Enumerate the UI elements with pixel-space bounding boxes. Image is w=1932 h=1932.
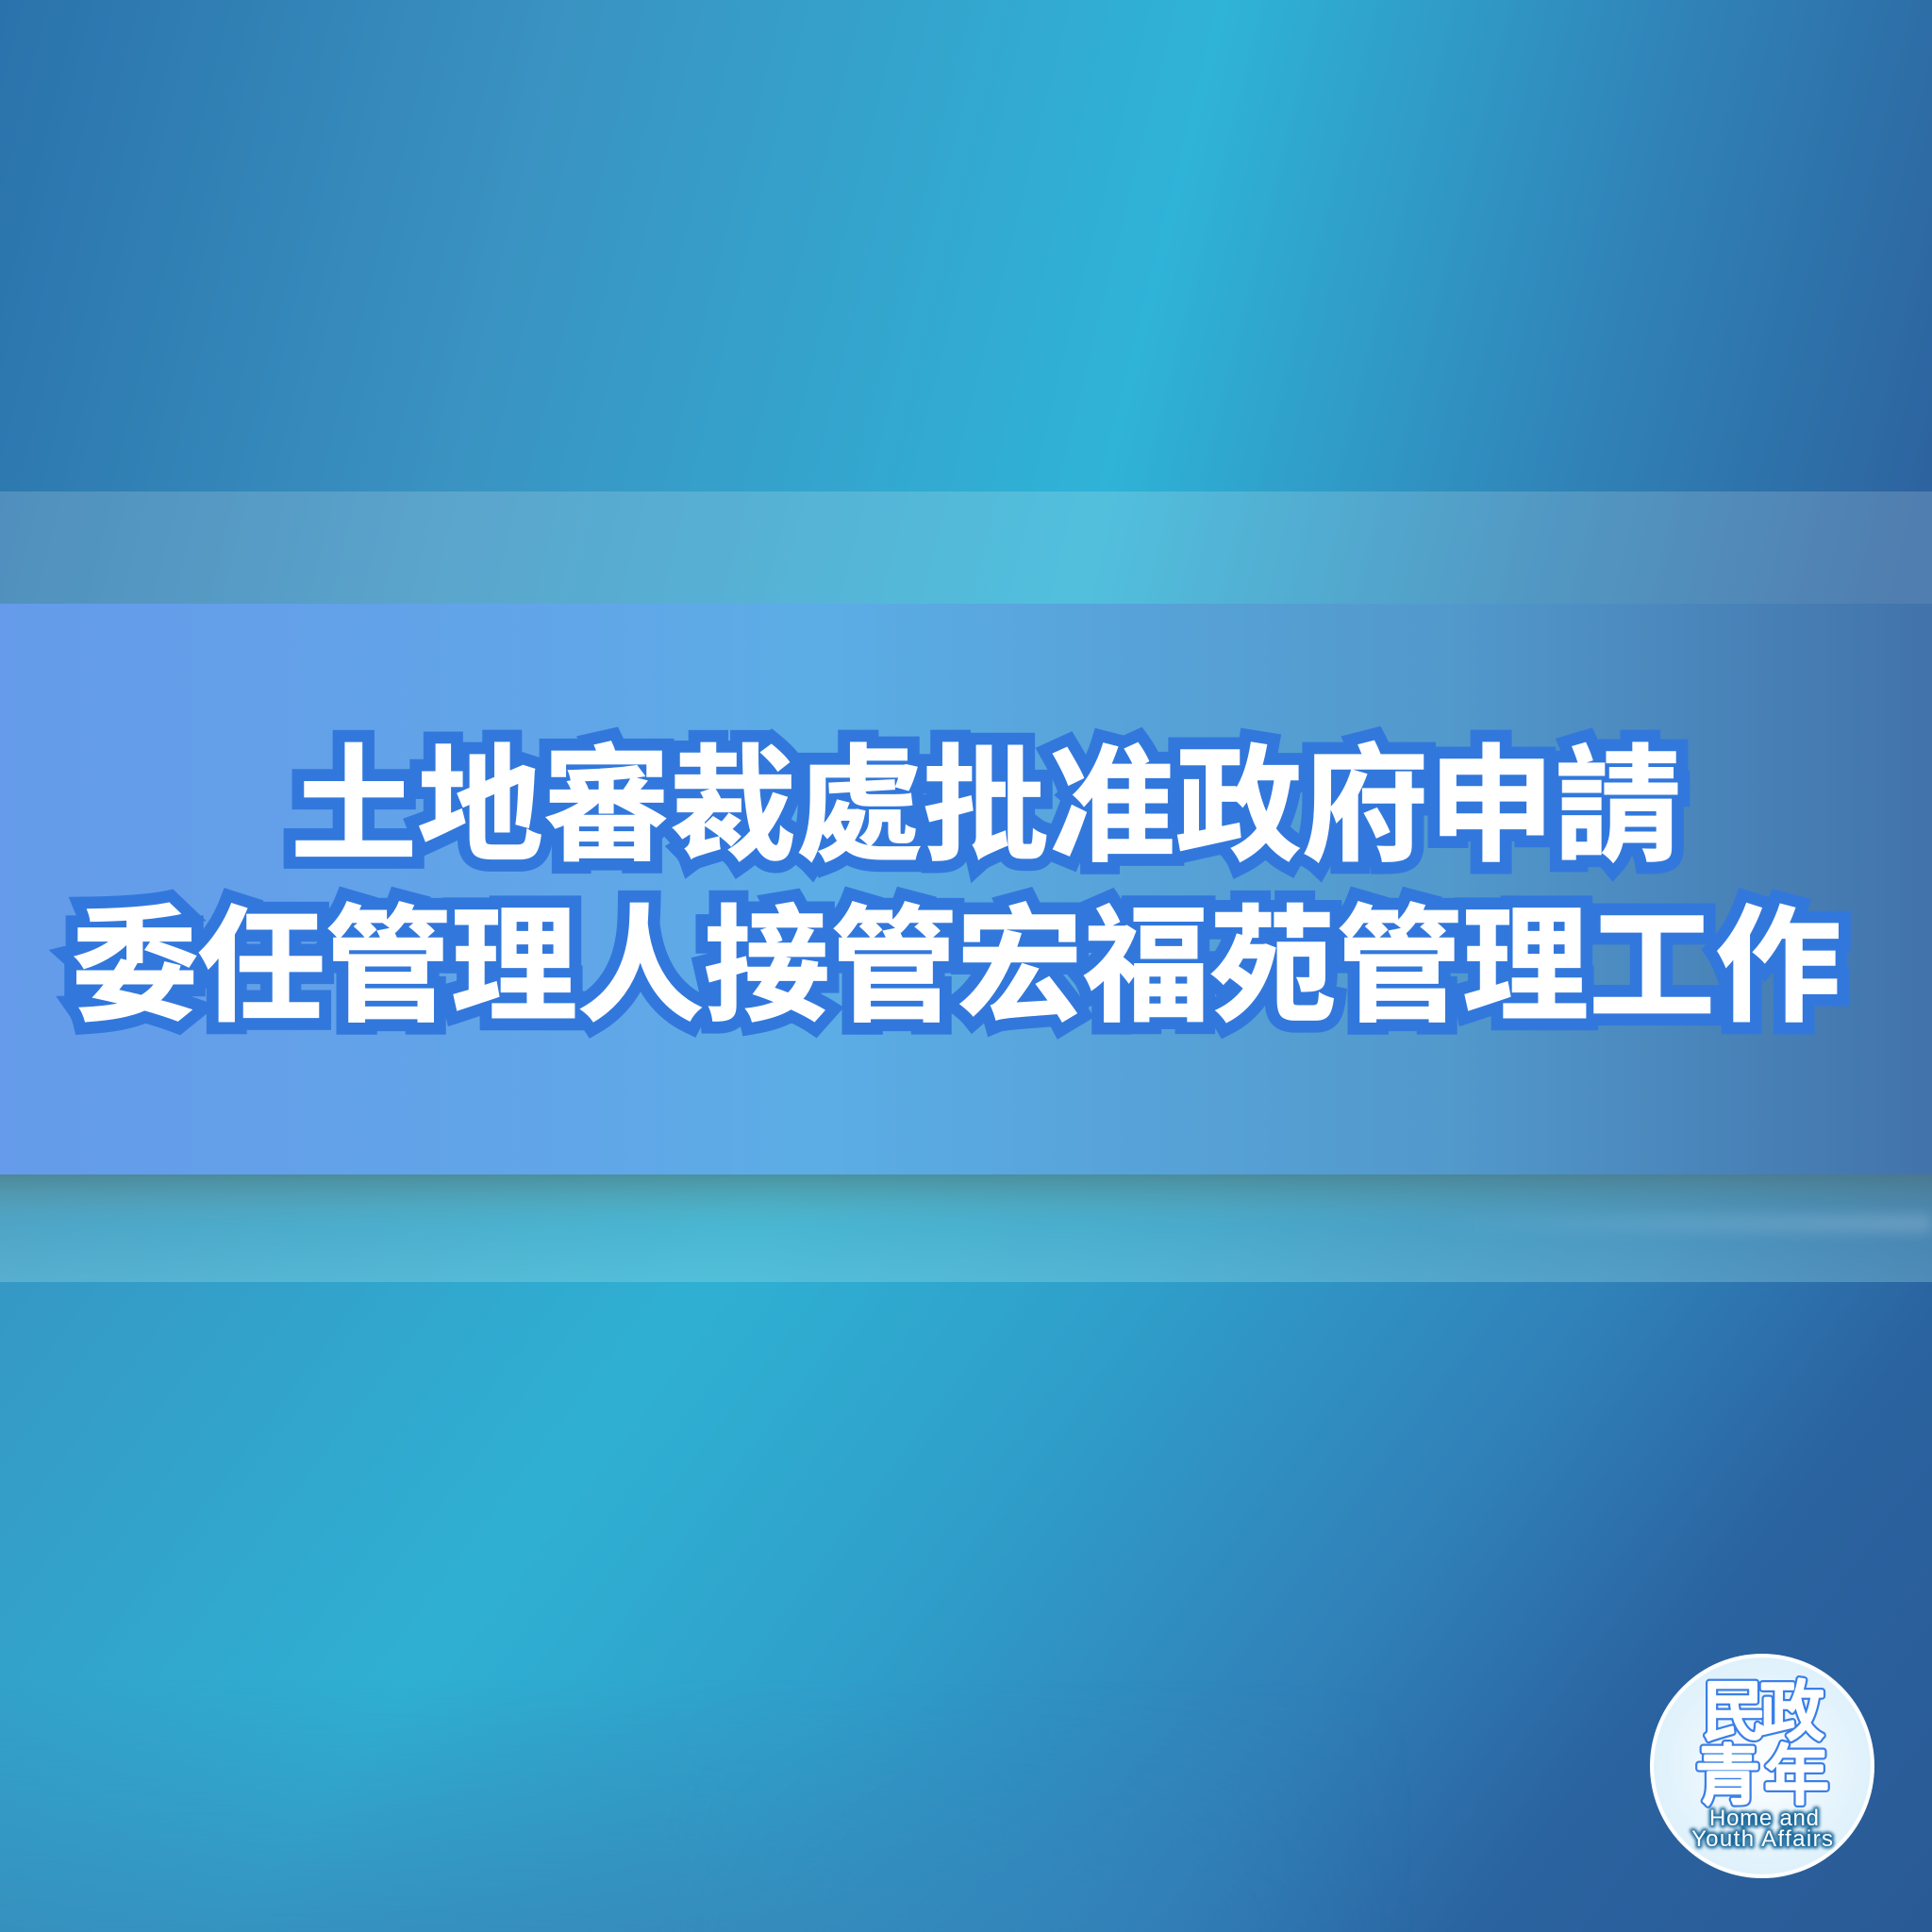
- title line 2: 委任管理人接管宏福苑管理工作: [72, 864, 1841, 1047]
- upper translucent band: [0, 491, 1932, 604]
- main title band: [0, 604, 1932, 1174]
- logo Chinese characters: 民政: [1702, 1658, 1824, 1753]
- logo English text: [1691, 1806, 1833, 1852]
- logo English text: Home and: [1709, 1806, 1819, 1831]
- logo: Home and Youth Affairs: [1650, 1654, 1874, 1878]
- lower translucent band: [0, 1174, 1932, 1282]
- title line 2: 委任管理人接管宏福苑管理工作: [72, 864, 1841, 1047]
- logo Chinese characters: 青年: [1695, 1723, 1829, 1817]
- logo Chinese characters: 民政: [1702, 1658, 1824, 1753]
- logo English text: Youth Affairs: [1691, 1826, 1833, 1852]
- logo English text: Home and: [1709, 1806, 1819, 1831]
- logo English text: Youth Affairs: [1691, 1826, 1833, 1852]
- title: [72, 704, 1841, 1047]
- logo Chinese characters: [1695, 1658, 1829, 1817]
- title line 1: 土地審裁處批准政府申請: [291, 704, 1681, 887]
- logo Chinese characters: 青年: [1695, 1723, 1829, 1817]
- logo disc: [1650, 1654, 1874, 1878]
- title line 1: 土地審裁處批准政府申請: [291, 704, 1681, 887]
